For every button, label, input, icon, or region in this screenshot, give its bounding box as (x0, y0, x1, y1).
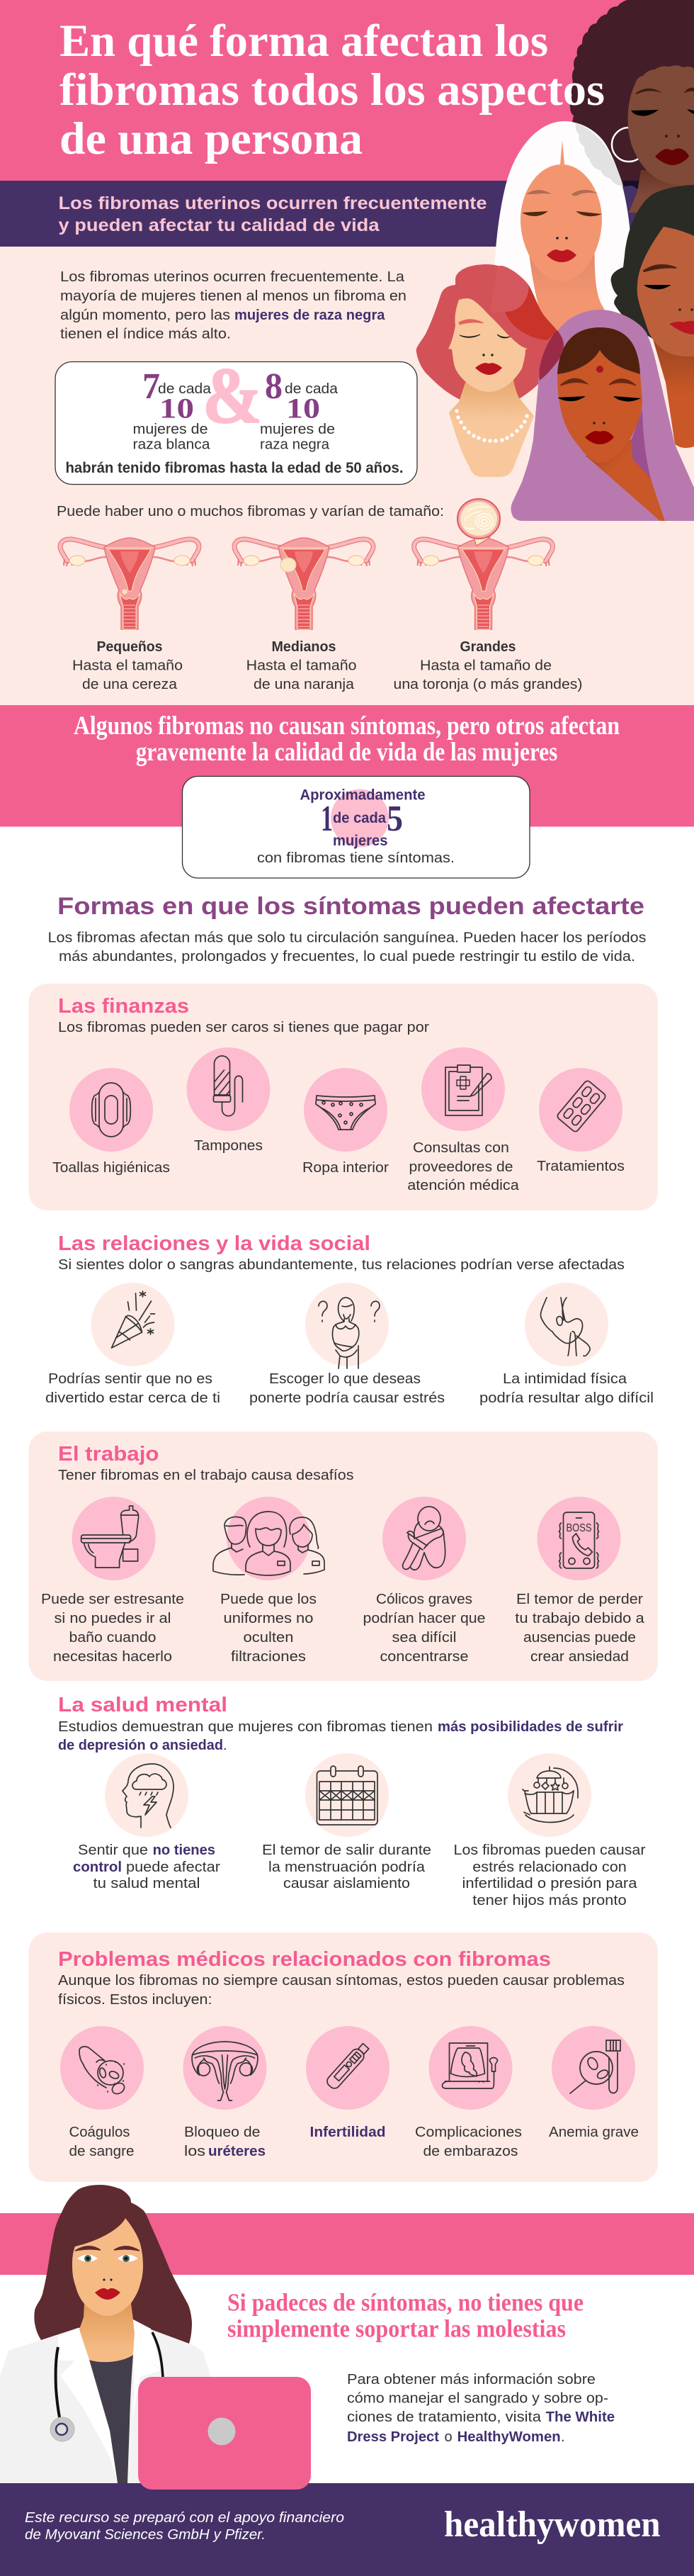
caption: medium: Medianos (272, 639, 336, 655)
intro paragraph: mujeres de raza negra (234, 308, 385, 323)
label: clots (69, 2125, 135, 2159)
caption: large: Hasta el tamaño de (420, 658, 552, 673)
more information text (347, 2372, 615, 2445)
label: intimacy: La intimidad física (503, 1371, 627, 1387)
stat: black women: de cada (285, 381, 339, 397)
heading: work: El trabajo (58, 1443, 159, 1466)
icon: ultrasound (429, 2026, 513, 2110)
label: uniforms: Puede que los (220, 1592, 317, 1607)
title: de una persona (59, 113, 363, 164)
label: infertility stress: Los fibromas pueden causar (453, 1843, 646, 1858)
callout: 1 in 5 women: mujeres (333, 833, 388, 849)
label: healthcare visits: Consultas con (413, 1140, 509, 1156)
intro paragraph (60, 269, 406, 342)
icon: blood clot (60, 2026, 144, 2110)
label: job fear: crear ansiedad (530, 1649, 629, 1665)
label: job fear: ausencias puede (523, 1630, 636, 1646)
section: relationships and social life (45, 1232, 654, 1406)
caption: large: Grandes (460, 639, 516, 655)
medical problems subtitle: físicos. Estos incluyen: (58, 1992, 212, 2008)
label: no control: puede afectar (126, 1860, 220, 1875)
label: infertility stress: infertilidad o presión para (462, 1876, 637, 1891)
pink band: symptoms (0, 705, 694, 826)
heading: mental health: La salud mental (58, 1694, 227, 1716)
label: no fun (45, 1371, 220, 1406)
label: underwear: Ropa interior (302, 1160, 389, 1176)
label: no control (73, 1843, 220, 1891)
funding disclosure: Este recurso se preparó con el apoyo financiero (25, 2510, 344, 2526)
woman with afro hair (569, 0, 694, 213)
label: healthcare visits: atención médica (407, 1178, 520, 1193)
stat: white women: de cada (158, 381, 212, 397)
mental health subtitle (58, 1719, 623, 1753)
funding disclosure (25, 2510, 344, 2543)
background: top pink banner (0, 0, 694, 181)
panel: medical problems (29, 1933, 658, 2182)
stat box: 7 and 8 of 10 women (55, 352, 417, 485)
icon: toilet (72, 1497, 156, 1580)
label: cramps: concentrarse (380, 1649, 469, 1665)
woman wearing purple headscarf and bindi (511, 310, 694, 521)
label: pads: Toallas higiénicas (52, 1160, 170, 1176)
callout: 1 in 5 women: 1 (321, 799, 333, 839)
label: ureter blockage: uréteres (208, 2144, 266, 2159)
stat: white women: 7 (142, 366, 160, 407)
medical problems subtitle: Aunque los fibromas no siempre causan síntomas, estos pueden causar problemas (58, 1973, 625, 1989)
medical problems subtitle (58, 1973, 625, 2008)
icon: phone call from boss (537, 1497, 620, 1580)
subtitle heading (58, 193, 487, 235)
label: ureter blockage (184, 2125, 266, 2159)
label: severe anemia: Anemia grave (549, 2125, 639, 2140)
label: uniforms: oculten (244, 1630, 293, 1646)
label: no control: tu salud mental (93, 1876, 200, 1891)
icon: laptop (138, 2377, 311, 2490)
label: clots: Coágulos (69, 2125, 130, 2140)
label: uniforms: filtraciones (231, 1649, 306, 1665)
label: pregnancy complications: Complicaciones (415, 2125, 522, 2140)
mental health subtitle: . (223, 1738, 227, 1753)
caption: small: Hasta el tamaño (72, 658, 183, 673)
label: isolation: la menstruación podría (268, 1860, 426, 1875)
stat: white women (133, 366, 212, 453)
woman with dark curled hair (611, 185, 694, 448)
fibroid size intro: Puede haber uno o muchos fibromas y varían de tamaño: (57, 504, 444, 519)
illustration: doctor (0, 2185, 211, 2483)
label: infertility stress: estrés relacionado con (472, 1860, 627, 1875)
pink band: call to action (0, 2213, 694, 2275)
icon: magnifier and test tube (552, 2026, 635, 2110)
label: cramps: sea difícil (392, 1630, 456, 1646)
callout: 1 in 5 women: 5 (387, 799, 403, 839)
more information text: o (445, 2429, 453, 2445)
uterus: large fibroid (414, 499, 552, 629)
logo: healthywomen: healthywomen (444, 2504, 661, 2545)
icon: uterus with ureters (183, 2026, 266, 2110)
caption: medium (246, 639, 357, 692)
title: fibromas todos los aspectos (59, 64, 605, 116)
caption: medium: de una naranja (254, 677, 355, 692)
caption: small: de una cereza (82, 677, 178, 692)
more information text: Para obtener más información sobre (347, 2372, 596, 2387)
symptoms headline: gravemente la calidad de vida de las mujeres (136, 738, 557, 767)
caption: small: Pequeños (96, 639, 163, 655)
background: purple subtitle band (0, 181, 694, 247)
label: infertility stress: tener hijos más pronto (472, 1893, 627, 1908)
label: isolation: causar aislamiento (283, 1876, 410, 1891)
stat: white women: mujeres de (133, 422, 208, 437)
woman with white hair (494, 121, 630, 340)
label: cramps: Cólicos graves (376, 1592, 472, 1607)
label: no control: Sentir que (78, 1843, 148, 1858)
label: intimacy (479, 1371, 654, 1406)
subtitle heading: y pueden afectar tu calidad de vida (58, 215, 380, 235)
heading: relationships: Las relaciones y la vida social (58, 1232, 370, 1255)
icon: clipboard (421, 1047, 505, 1131)
label: toilet stress: si no puedes ir al (54, 1611, 171, 1626)
label: infertility: Infertilidad (310, 2125, 385, 2140)
label: treatments: Tratamientos (537, 1159, 625, 1174)
more information text: ciones de tratamiento, visita (347, 2409, 542, 2425)
icon: phone call from boss: BOSS (567, 1522, 592, 1534)
label: clothing stress: ponerte podría causar estrés (249, 1390, 445, 1406)
label: ureter blockage: los (184, 2144, 205, 2159)
label: uniforms (220, 1592, 317, 1665)
label: toilet stress: Puede ser estresante (41, 1592, 184, 1607)
more information text: . (561, 2429, 565, 2445)
icon: underwear (304, 1068, 387, 1152)
stat: white women: raza blanca (133, 437, 210, 453)
caption: small (72, 639, 183, 692)
callout: 1 in 5 women: de cada (333, 810, 386, 826)
label: uniforms: uniformes no (224, 1611, 313, 1626)
background: peach intro section (0, 247, 694, 705)
label: intimacy: podría resultar algo difícil (479, 1390, 654, 1406)
callout: 1 in 5 women: con fibromas tiene síntomas. (257, 850, 455, 866)
icon: three women in uniforms (213, 1497, 324, 1580)
label: pregnancy complications: de embarazos (423, 2144, 518, 2159)
subtitle heading: Los fibromas uterinos ocurren frecuentemente (58, 193, 487, 213)
intro paragraph: tienen el índice más alto. (60, 326, 231, 342)
stat conclusion: habrán tenido fibromas hasta la edad de 50 años. (65, 460, 404, 476)
icon: woman choosing clothing (305, 1283, 389, 1368)
caption: medium: Hasta el tamaño (246, 658, 357, 673)
uterus: small fibroid (60, 538, 199, 629)
more information text: The White (546, 2409, 615, 2425)
title: En qué forma afectan los (59, 16, 548, 67)
heading: finances: Las finanzas (58, 995, 189, 1018)
label: cramps (363, 1592, 486, 1665)
section heading: Formas en que los síntomas pueden afectarte (57, 893, 644, 920)
intro paragraph: mayoría de mujeres tienen al menos un fibroma en (60, 288, 406, 304)
intro paragraph: algún momento, pero las (60, 308, 230, 323)
label: clots: de sangre (69, 2144, 135, 2159)
label: no fun: divertido estar cerca de ti (45, 1390, 220, 1406)
section intro text: más abundantes, prolongados y frecuentes, lo cual puede restringir tu estilo de vida. (59, 949, 635, 964)
panel: finances (29, 984, 658, 1210)
call to action headline (227, 2289, 584, 2343)
stat: white women: 10 (159, 393, 194, 424)
stat: black women: 10 (286, 393, 320, 424)
label: infertility stress (453, 1843, 646, 1908)
icon: head with storm (105, 1753, 188, 1837)
label: cramps: podrían hacer que (363, 1611, 486, 1626)
ampersand: & (203, 352, 262, 440)
call to action headline: Si padeces de síntomas, no tienes que (227, 2289, 584, 2316)
mental health subtitle: de depresión o ansiedad (58, 1738, 223, 1753)
label: tampons: Tampones (194, 1138, 263, 1154)
call to action headline: simplemente soportar las molestias (227, 2315, 566, 2343)
label: healthcare visits (407, 1140, 520, 1193)
panel: work (29, 1432, 658, 1681)
section intro text: Los fibromas afectan más que solo tu circulación sanguínea. Pueden hacer los períodos (48, 930, 646, 945)
more information text: cómo manejar el sangrado y sobre op- (347, 2391, 608, 2407)
label: clothing stress: Escoger lo que deseas (269, 1371, 421, 1387)
funding disclosure: de Myovant Sciences GmbH y Pfizer. (25, 2527, 266, 2543)
icon: pills (539, 1068, 622, 1152)
uterus: medium fibroid (234, 538, 373, 629)
label: ureter blockage: Bloqueo de (184, 2125, 261, 2140)
label: toilet stress: necesitas hacerlo (53, 1649, 172, 1665)
illustration: group of diverse women (416, 0, 694, 521)
woman with red hair and pearl necklace (416, 264, 564, 477)
icon: figure hugging knees (382, 1497, 466, 1580)
label: isolation (262, 1843, 431, 1891)
finances subtitle: Los fibromas pueden ser caros si tienes que pagar por (58, 1020, 429, 1035)
icon: crib with mobile (508, 1753, 591, 1837)
label: no control: control (73, 1860, 122, 1875)
caption: large: una toronja (o más grandes) (394, 677, 582, 692)
section: mental health (58, 1694, 646, 1908)
caption: large (394, 639, 582, 692)
label: job fear (515, 1592, 645, 1665)
mental health subtitle: más posibilidades de sufrir (438, 1719, 623, 1735)
label: clothing stress (249, 1371, 445, 1406)
icon: pregnancy test (306, 2026, 389, 2110)
symptoms headline: Algunos fibromas no causan síntomas, pero otros afectan (74, 712, 620, 741)
relationships subtitle: Si sientes dolor o sangras abundantemente, tus relaciones podrían verse afectadas (58, 1257, 625, 1273)
stat: black women: raza negra (260, 437, 330, 453)
label: job fear: El temor de perder (516, 1592, 643, 1607)
label: isolation: El temor de salir durante (262, 1843, 431, 1858)
mental health subtitle: Estudios demuestran que mujeres con fibromas tienen (58, 1719, 433, 1735)
label: healthcare visits: proveedores de (409, 1159, 513, 1175)
stat: black women: mujeres de (260, 422, 335, 437)
footer band (0, 2483, 694, 2576)
heading: medical problems: Problemas médicos relacionados con fibromas (58, 1948, 551, 1971)
icon: sanitary pad (69, 1068, 153, 1152)
more information text: Dress Project (347, 2429, 439, 2445)
label: no control: no tienes (153, 1843, 215, 1858)
icon: calendar (305, 1753, 389, 1837)
icon: tampon (187, 1047, 271, 1131)
more information text: HealthyWomen (457, 2429, 561, 2445)
label: job fear: tu trabajo debido a (515, 1611, 645, 1626)
work subtitle: Tener fibromas en el trabajo causa desafíos (58, 1468, 354, 1483)
section intro text (48, 930, 646, 964)
label: toilet stress: baño cuando (69, 1630, 156, 1646)
label: no fun: Podrías sentir que no es (48, 1371, 212, 1387)
label: pregnancy complications (415, 2125, 522, 2159)
symptoms headline (74, 712, 620, 767)
stat: black women (260, 366, 339, 453)
intro paragraph: Los fibromas uterinos ocurren frecuentemente. La (60, 269, 405, 285)
icon: hands holding heart (525, 1283, 608, 1366)
label: toilet stress (41, 1592, 184, 1665)
stat: black women: 8 (265, 366, 283, 407)
icon: party popper cup (91, 1283, 174, 1366)
title (59, 16, 605, 164)
callout: 1 in 5 women (183, 777, 530, 878)
callout: 1 in 5 women: Aproximadamente (300, 787, 425, 804)
